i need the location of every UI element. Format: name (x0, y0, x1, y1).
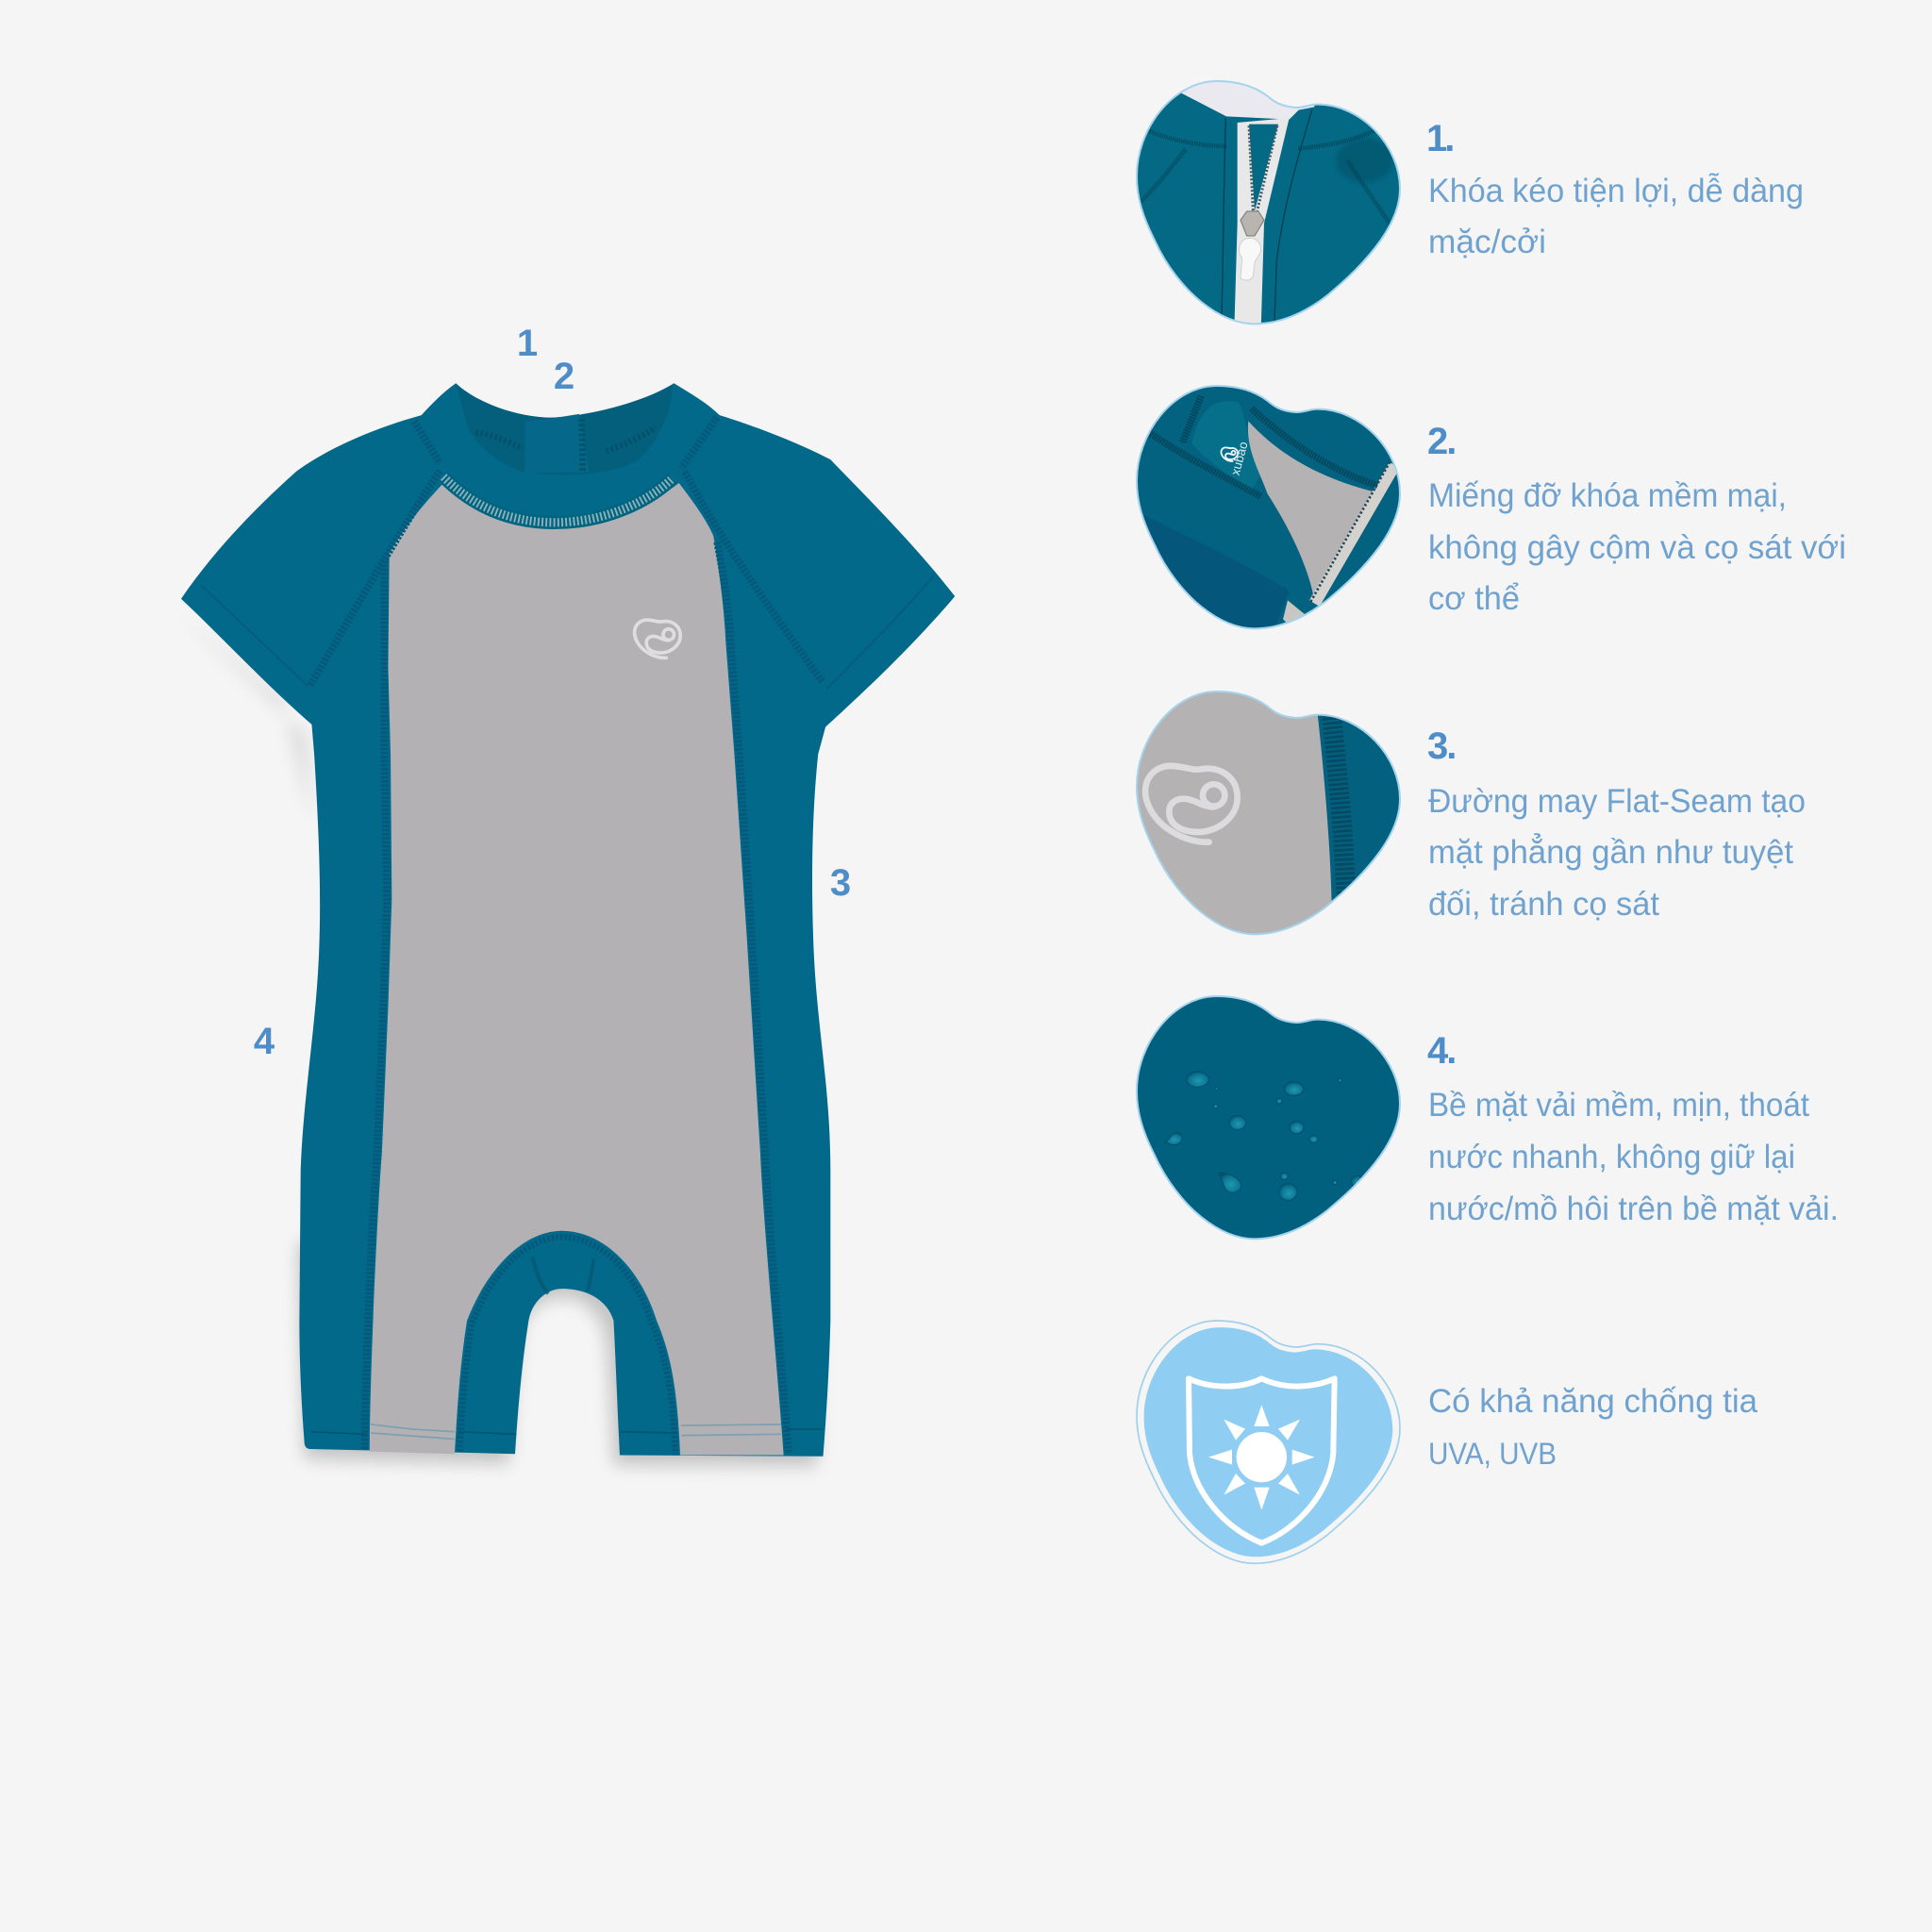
fabric (1138, 387, 1399, 625)
zip teeth (1249, 125, 1277, 210)
line: Bề mặt vải mềm, mịn, thoát (1428, 1087, 1809, 1124)
garment callout number 4: 4 (254, 1021, 275, 1062)
crotch gusset seam (459, 1237, 675, 1454)
ray west (1208, 1450, 1232, 1465)
ray north-east (1278, 1420, 1300, 1441)
shade (1337, 139, 1393, 182)
line: nước nhanh, không giữ lại (1428, 1139, 1795, 1175)
garment teal body (181, 383, 955, 1457)
droplet (1229, 1115, 1246, 1130)
shield (1189, 1378, 1335, 1543)
droplet (1280, 1173, 1288, 1179)
droplet (1284, 1082, 1304, 1095)
heart outline (1137, 996, 1400, 1239)
logo (1145, 766, 1238, 842)
number 4: 4. (1427, 1030, 1455, 1072)
heart outline (1137, 386, 1400, 628)
droplet (1309, 1135, 1318, 1142)
garment callout number 2: 2 (554, 356, 575, 397)
heart detail 4: water droplets (1136, 995, 1401, 1240)
garment shadow (298, 1242, 817, 1466)
zip pull (1240, 238, 1261, 280)
line: đối, tránh cọ sát (1428, 886, 1659, 923)
line: Khóa kéo tiện lợi, dễ dàng (1428, 173, 1804, 209)
heart detail 1: zipper (1136, 80, 1401, 325)
heart detail 5: UV shield icon (1137, 1321, 1400, 1563)
sun (1208, 1405, 1315, 1510)
droplet (1279, 1183, 1297, 1200)
lower zipper (1283, 600, 1305, 623)
small droplet (1276, 1098, 1282, 1104)
ray south (1254, 1488, 1270, 1510)
droplets (1165, 1072, 1364, 1200)
neck interior (456, 385, 673, 475)
line: Đường may Flat-Seam tạo (1428, 783, 1806, 820)
zipper teeth (1309, 462, 1390, 604)
sun disc (1237, 1432, 1287, 1482)
small droplet (1333, 1180, 1337, 1185)
crotch gusset folds (532, 1257, 594, 1293)
droplet (1351, 1175, 1364, 1187)
small droplet (1215, 1087, 1218, 1091)
feature text 4 (1427, 1030, 1839, 1227)
droplet (1290, 1121, 1304, 1134)
zipper tape (1314, 465, 1394, 604)
flat seam stitching (1332, 717, 1346, 893)
small droplet (1213, 1104, 1218, 1108)
grey front panel (370, 483, 784, 1456)
teal fabric (1317, 715, 1399, 901)
sleeve shadow (175, 608, 311, 823)
feature text 3 (1427, 725, 1806, 923)
line: UVA, UVB (1428, 1437, 1557, 1471)
back zip placket (525, 414, 589, 474)
line: cơ thể (1428, 580, 1520, 617)
line: nước/mồ hôi trên bề mặt vải. (1428, 1191, 1839, 1227)
side seams (365, 542, 789, 1454)
inner neck stitching (475, 419, 656, 471)
heart outline (1137, 81, 1400, 324)
small droplet (1338, 1078, 1341, 1082)
collar stitching (443, 476, 673, 523)
heart detail 3: flat seam (1136, 691, 1401, 936)
large droplets (1186, 1072, 1208, 1087)
number 2: 2. (1427, 421, 1455, 462)
line: mặt phẳng gần như tuyệt (1428, 833, 1793, 871)
fabric (1138, 92, 1399, 323)
droplet (1219, 1173, 1241, 1192)
feature text 2 (1427, 421, 1846, 617)
feature text 5 (1428, 1383, 1758, 1471)
neck stitching (1146, 396, 1377, 496)
line: Miếng đỡ khóa mềm mại, (1428, 477, 1787, 514)
swimsuit product illustration (175, 383, 955, 1466)
sleeve hem creases (201, 575, 934, 689)
zip slider (1241, 211, 1264, 236)
collar seams (414, 418, 717, 468)
line: không gây cộm và cọ sát với (1428, 529, 1846, 566)
garment callout number 3: 3 (830, 862, 851, 904)
line: mặc/cởi (1428, 224, 1546, 260)
seams (1140, 130, 1391, 226)
leg hem stitching (371, 1424, 781, 1440)
placket lines (1222, 110, 1312, 321)
chest logo (635, 620, 680, 658)
infographic canvas (181, 80, 1844, 1564)
ray north-west (1224, 1420, 1245, 1441)
number 1: 1. (1426, 118, 1453, 159)
lining inner (1191, 401, 1261, 491)
zipper tape (1234, 118, 1290, 330)
ray south-west (1224, 1474, 1245, 1495)
line: Có khả năng chống tia (1428, 1383, 1758, 1420)
grey fabric (1138, 692, 1332, 934)
fabric (1138, 997, 1399, 1238)
raglan seams (310, 471, 823, 685)
heart outline (1137, 691, 1400, 934)
feature text 1 (1426, 118, 1804, 260)
ray east (1292, 1450, 1315, 1465)
ray south-east (1278, 1474, 1300, 1495)
lower flap shade (1143, 515, 1289, 628)
grey lining (1248, 421, 1374, 600)
label brand text: xubao (1228, 440, 1251, 476)
heart fill (1144, 1327, 1392, 1557)
heart outline (1137, 1321, 1400, 1563)
leg hem teal stitching (310, 1429, 823, 1434)
droplet (1165, 1133, 1182, 1145)
number 3: 3. (1427, 725, 1455, 767)
ray north (1254, 1405, 1270, 1426)
label logo (1221, 447, 1238, 461)
garment callout number 1: 1 (517, 323, 538, 364)
zip opening (1249, 125, 1278, 210)
heart detail 2: zipper guard (1136, 385, 1401, 630)
open neck area (1181, 82, 1315, 120)
